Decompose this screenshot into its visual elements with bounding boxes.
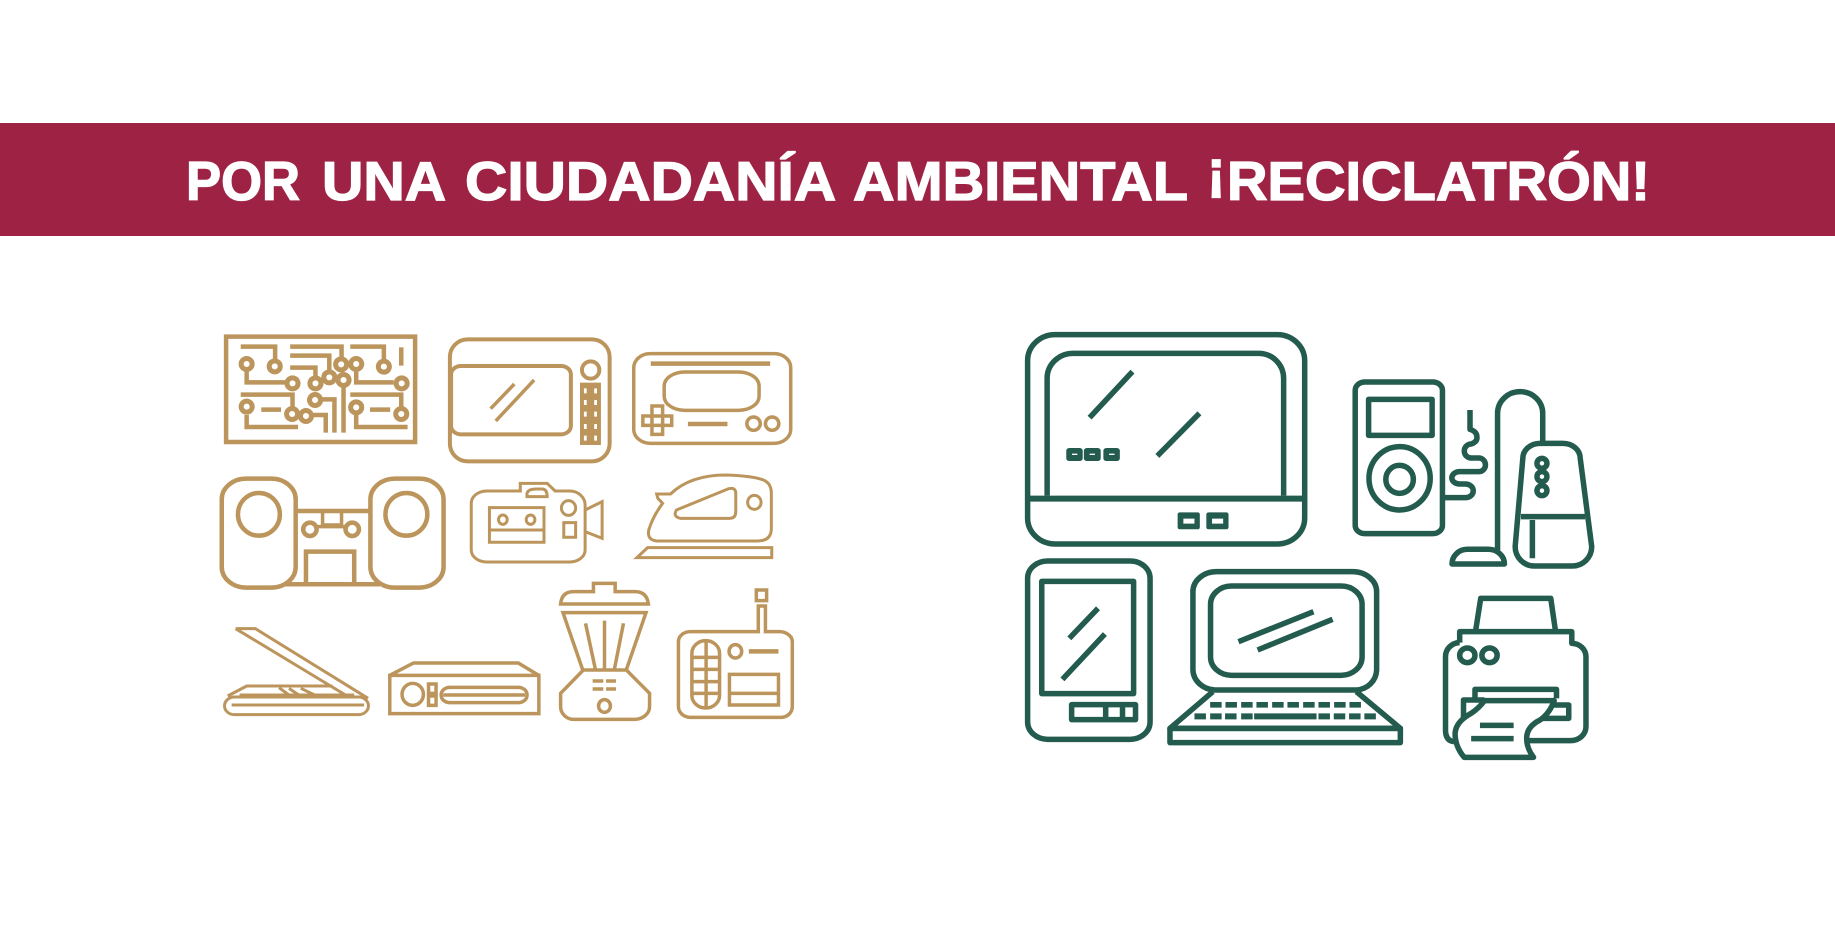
title: RECICLATRÓN! (1227, 150, 1650, 212)
title banner (0, 123, 1835, 236)
title: UNA (322, 150, 445, 212)
icon: stereo (222, 479, 444, 588)
icon: video camera (471, 483, 602, 562)
icon: scanner (225, 629, 368, 715)
title: AMBIENTAL (853, 150, 1187, 212)
panel: green electronics (1028, 335, 1592, 757)
icon: handheld game console (634, 354, 791, 443)
icon: radio (678, 590, 792, 717)
icon: printer (1446, 598, 1586, 757)
icon: computer mouse (1452, 392, 1592, 566)
title: POR (186, 150, 300, 212)
icon: blender (561, 583, 650, 719)
icon: microwave (450, 339, 610, 461)
icon: desktop computer (1170, 572, 1400, 743)
icon: DVD player (390, 663, 539, 714)
icon: tablet (1028, 561, 1150, 739)
title: ¡ (1207, 139, 1225, 201)
title: CIUDADANÍA (465, 150, 835, 212)
panel: gold appliances (222, 337, 792, 719)
icon: iron (637, 475, 772, 558)
icon: circuit board (226, 337, 415, 442)
icon: monitor (1028, 335, 1305, 544)
icon: music player (1355, 382, 1485, 534)
keyboard keys (1194, 702, 1376, 719)
